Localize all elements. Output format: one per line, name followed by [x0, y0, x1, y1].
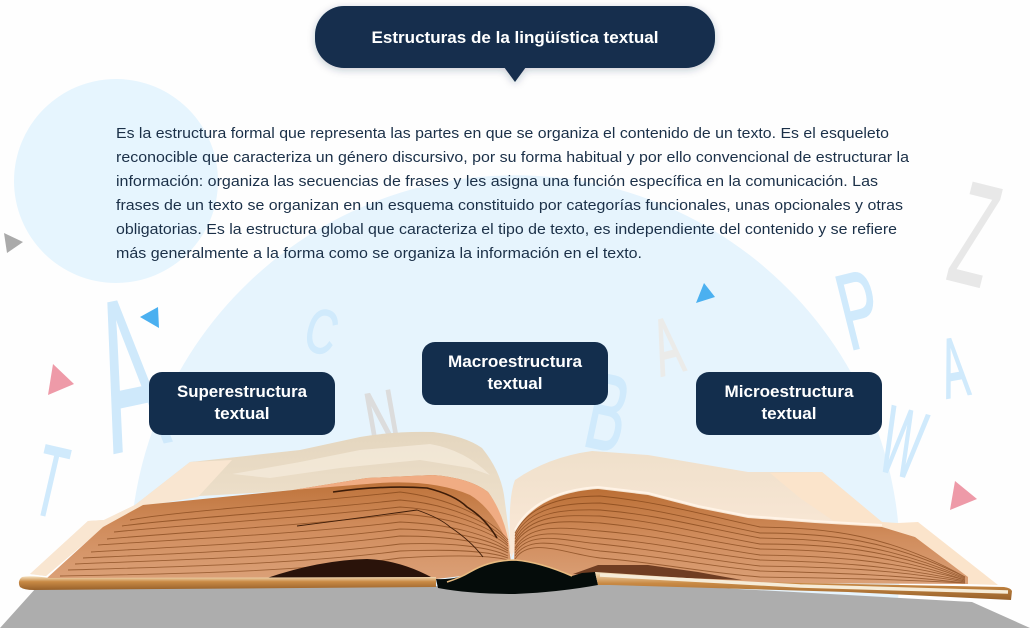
- decorative large circle: [130, 175, 900, 628]
- box: Microestructura textual: [696, 372, 882, 435]
- background letters: T: [24, 425, 77, 539]
- text block: description: más generalmente a la forma como se organiza la información en el texto.: [116, 246, 642, 262]
- box: Superestructura textual: textual: [214, 404, 270, 423]
- background letters: Z: [937, 151, 1013, 318]
- right page edge lines: [515, 496, 965, 583]
- box: Microestructura textual: textual: [762, 404, 816, 423]
- right cover highlight: [600, 575, 1008, 592]
- background letters: A: [644, 301, 692, 393]
- right page light edge: [515, 487, 882, 530]
- left page blank edge: [30, 460, 232, 576]
- background letters: W: [869, 386, 936, 499]
- text block: description: reconocible que caracteriza un género discursivo, por su forma habitual y por ello convencional de estructurar la: [116, 150, 910, 166]
- background letters: P: [826, 248, 892, 374]
- triangle: gray: [4, 233, 23, 253]
- spine: [436, 560, 598, 594]
- left cover: [19, 576, 436, 590]
- text block: description: [116, 126, 910, 262]
- box: Microestructura textual: Microestructura: [724, 382, 854, 401]
- box: Superestructura textual: Superestructura: [177, 382, 308, 401]
- background letters: B: [576, 351, 639, 476]
- box: Superestructura textual: [149, 372, 335, 435]
- left page pink band: [293, 475, 510, 550]
- background letters: C: [298, 295, 345, 369]
- box: Macroestructura textual: textual: [488, 374, 542, 393]
- text block: description: frases de un texto se organizan en un esquema constituido por categorías funcionales, unas opcionales y otras: [116, 198, 903, 214]
- right page flyleaf: [770, 472, 998, 585]
- box: Macroestructura textual: [422, 342, 608, 405]
- text block: description: Es la estructura formal que representa las partes en que se organiza el contenido de un texto. Es el esqueleto: [116, 126, 889, 142]
- left page dark gap lines: [297, 487, 497, 557]
- left page text band: [232, 444, 490, 478]
- left page block: [47, 475, 511, 579]
- text block: description: obligatorias. Es la estructura global que caracteriza el tipo de texto, es independiente del contenido y se refiere: [116, 222, 897, 238]
- text block: description: información: organiza las secuencias de frases y les asigna una función específica en la comunicación. Las: [116, 174, 878, 190]
- left page edge lines: [60, 492, 508, 576]
- background letters: A: [73, 251, 182, 498]
- right page block: [514, 489, 968, 584]
- background letters: [24, 151, 1013, 539]
- box: Macroestructura textual: Macroestructura: [448, 352, 583, 371]
- triangle: blue left: [140, 307, 159, 328]
- background letters: A: [933, 319, 975, 416]
- spine gold edge: [447, 560, 572, 582]
- title: [315, 6, 715, 82]
- triangle: blue middle: [696, 283, 715, 303]
- right cover: [595, 572, 1012, 600]
- left flyleaf and page: [30, 432, 512, 576]
- title: Estructuras de la lingüística textual: [372, 28, 658, 47]
- floor shadow: [0, 582, 1030, 628]
- background letters: N: [358, 371, 407, 473]
- right dark wedge: [573, 565, 742, 580]
- decorative small circle: [14, 79, 218, 283]
- triangle: pink left: [48, 364, 74, 395]
- illustration: open book: [19, 432, 1012, 600]
- right page: [510, 451, 882, 558]
- triangle: pink right: [950, 481, 977, 510]
- left dark wedge: [267, 559, 433, 578]
